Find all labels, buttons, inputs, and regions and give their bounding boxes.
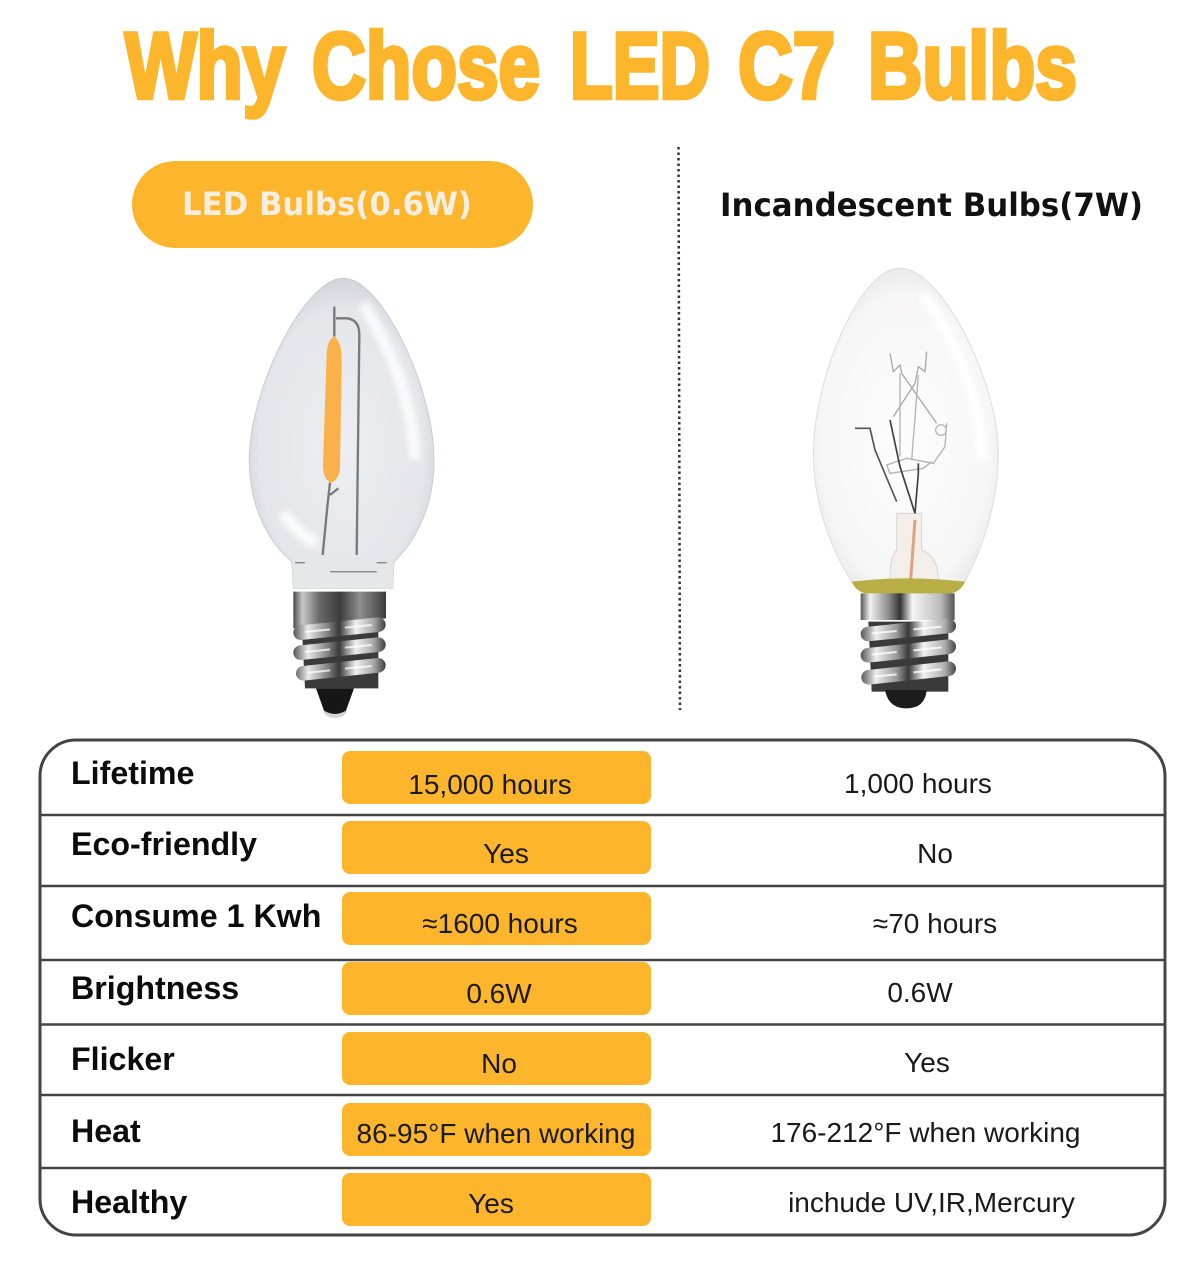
row: Heat [71, 1103, 1081, 1156]
LED heading: LED Bulbs(0.6W) [182, 185, 472, 223]
row: Healthy [71, 1173, 1075, 1226]
row: Lifetime [71, 751, 992, 804]
row: Brightness [71, 962, 953, 1015]
row: Consume 1 Kwh: ≈70 hours [873, 908, 997, 939]
row: Brightness: 0.6W [887, 977, 953, 1008]
tip [885, 690, 927, 708]
incandescent heading: Incandescent Bulbs(7W) [720, 186, 1143, 224]
icon: incandescent bulb [813, 268, 998, 708]
comparison table [40, 740, 1165, 1235]
row: Lifetime: 1,000 hours [844, 768, 992, 799]
icon: LED bulb [249, 278, 434, 718]
row: Eco-friendly: Eco-friendly [71, 826, 257, 862]
row: Healthy: Yes [468, 1188, 514, 1219]
row: Healthy: Healthy [71, 1184, 187, 1220]
title: C7 [738, 13, 835, 118]
row: Brightness: 0.6W [466, 978, 532, 1009]
row: Consume 1 Kwh: ≈1600 hours [422, 908, 578, 939]
row: Flicker: Yes [904, 1047, 950, 1078]
row: Heat: 86-95°F when working [357, 1118, 635, 1149]
panel: LED bulbs header pill [132, 161, 533, 248]
title: Why [125, 13, 285, 118]
collar [852, 578, 965, 594]
row: Eco-friendly: No [917, 838, 953, 869]
row: Consume 1 Kwh [71, 892, 997, 945]
title: LED [570, 13, 710, 118]
row: Flicker [71, 1032, 950, 1085]
row: Consume 1 Kwh: Consume 1 Kwh [71, 898, 321, 934]
row: Brightness: Brightness [71, 970, 239, 1006]
row: Healthy: inchude UV,IR,Mercury [788, 1187, 1075, 1218]
title: Bulbs [868, 13, 1077, 118]
title: Chose [312, 13, 540, 118]
filament [323, 337, 342, 483]
row: Lifetime: Lifetime [71, 755, 194, 791]
stem glass [890, 513, 938, 580]
wires [323, 307, 359, 555]
row: Flicker: No [481, 1048, 517, 1079]
row: Heat: Heat [71, 1113, 141, 1149]
row: Heat: 176-212°F when working [770, 1117, 1081, 1148]
row: Eco-friendly: Yes [483, 838, 529, 869]
base [293, 592, 386, 628]
title [125, 13, 1077, 118]
base [861, 593, 955, 620]
row: Flicker: Flicker [71, 1041, 175, 1077]
row: Eco-friendly [71, 821, 953, 874]
filament wires [855, 352, 947, 580]
tip [316, 688, 354, 716]
row: Lifetime: 15,000 hours [408, 769, 572, 800]
